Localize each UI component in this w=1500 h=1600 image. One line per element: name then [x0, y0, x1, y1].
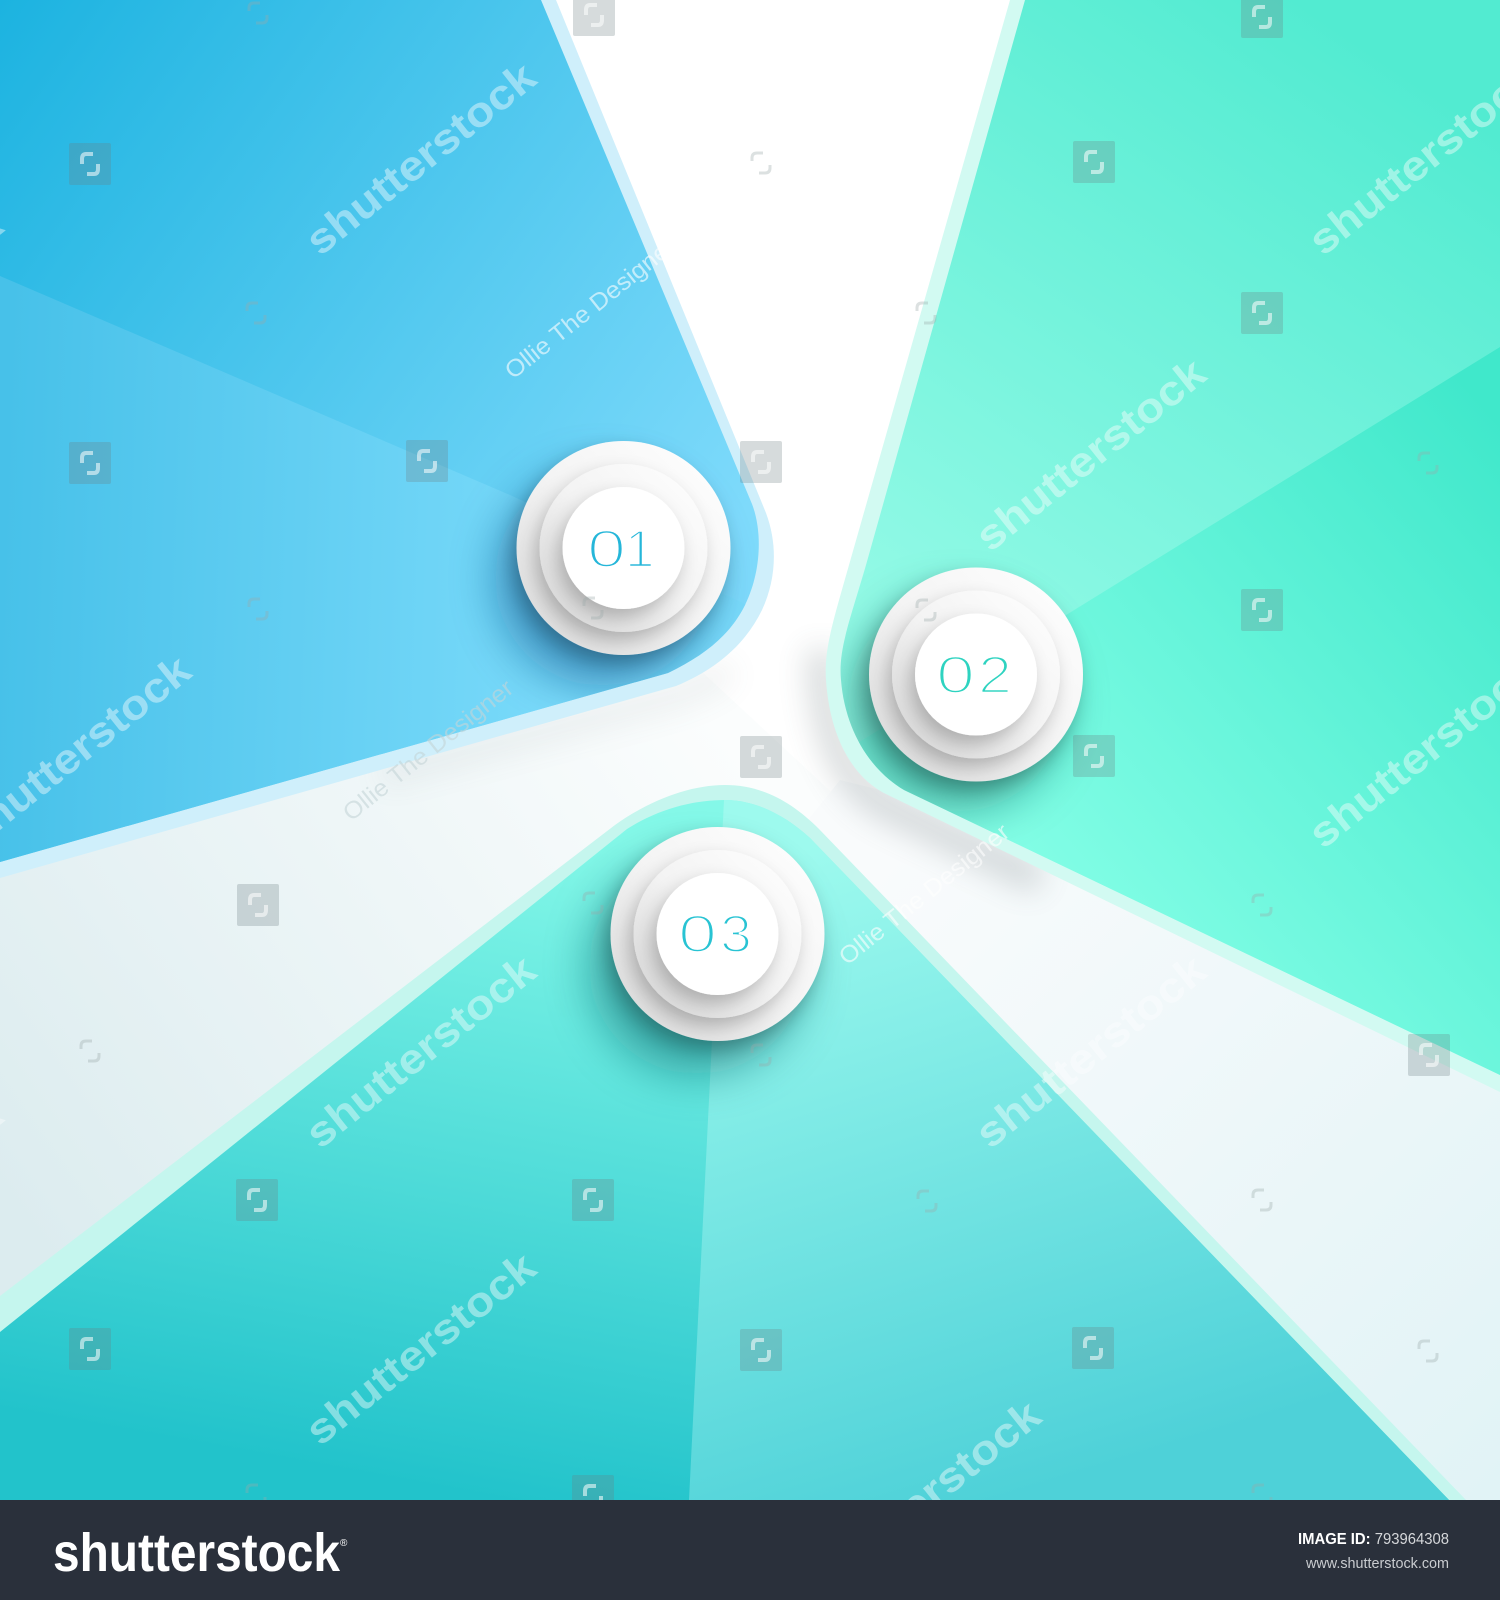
badge: 02: 0: [936, 646, 975, 705]
badge: 01: 1: [625, 520, 654, 579]
panel: teal step 03: [0, 780, 1500, 1500]
watermark: shutterstock text: shutterstock: [296, 52, 545, 264]
footer logo mark: ®: [340, 1538, 348, 1549]
disc shadow: step 02: [848, 596, 1064, 812]
watermark: Ollie The Designer: [338, 233, 1015, 971]
watermark: shutterstock text: shutterstock: [966, 348, 1215, 560]
badge: 03: [610, 827, 824, 1041]
badge: 01: [516, 441, 730, 655]
panel: green step 02: [826, 0, 1500, 1100]
footer: website: www.shutterstock.com: [1305, 1555, 1449, 1572]
watermark: Ollie The Designer: Ollie The Designer: [500, 233, 681, 385]
footer logo: shutterstock: [53, 1523, 341, 1583]
badge: 03: 3: [720, 905, 752, 964]
disc shadow: step 01: [495, 470, 711, 686]
badge: 02: 2: [978, 646, 1012, 705]
badge: 03: 0: [678, 905, 717, 964]
badge: 02: [869, 568, 1083, 782]
panel: left white wedge: [0, 670, 840, 1330]
panel shadow: step 01 edge: [380, 668, 730, 775]
disc shadow: step 03: [589, 858, 805, 1074]
panel: right white wedge: [800, 780, 1500, 1500]
footer bar: [0, 1500, 1500, 1600]
footer: image id: IMAGE ID: 793964308: [1298, 1531, 1449, 1548]
badge: 01: 0: [587, 520, 626, 579]
watermark: shutterstock text: shutterstock: [296, 945, 545, 1157]
watermark: shutterstock text: shutterstock: [296, 1242, 545, 1454]
watermark: shutterstock text: shutterstock: [801, 1390, 1050, 1600]
watermark: shutterstock text: shutterstock: [966, 945, 1215, 1157]
panel shadow: step 02 edge: [822, 650, 1040, 880]
watermark: Ollie The Designer: Ollie The Designer: [338, 675, 519, 827]
panel: blue step 01: [0, 0, 780, 900]
watermark: Ollie The Designer: Ollie The Designer: [834, 819, 1015, 971]
